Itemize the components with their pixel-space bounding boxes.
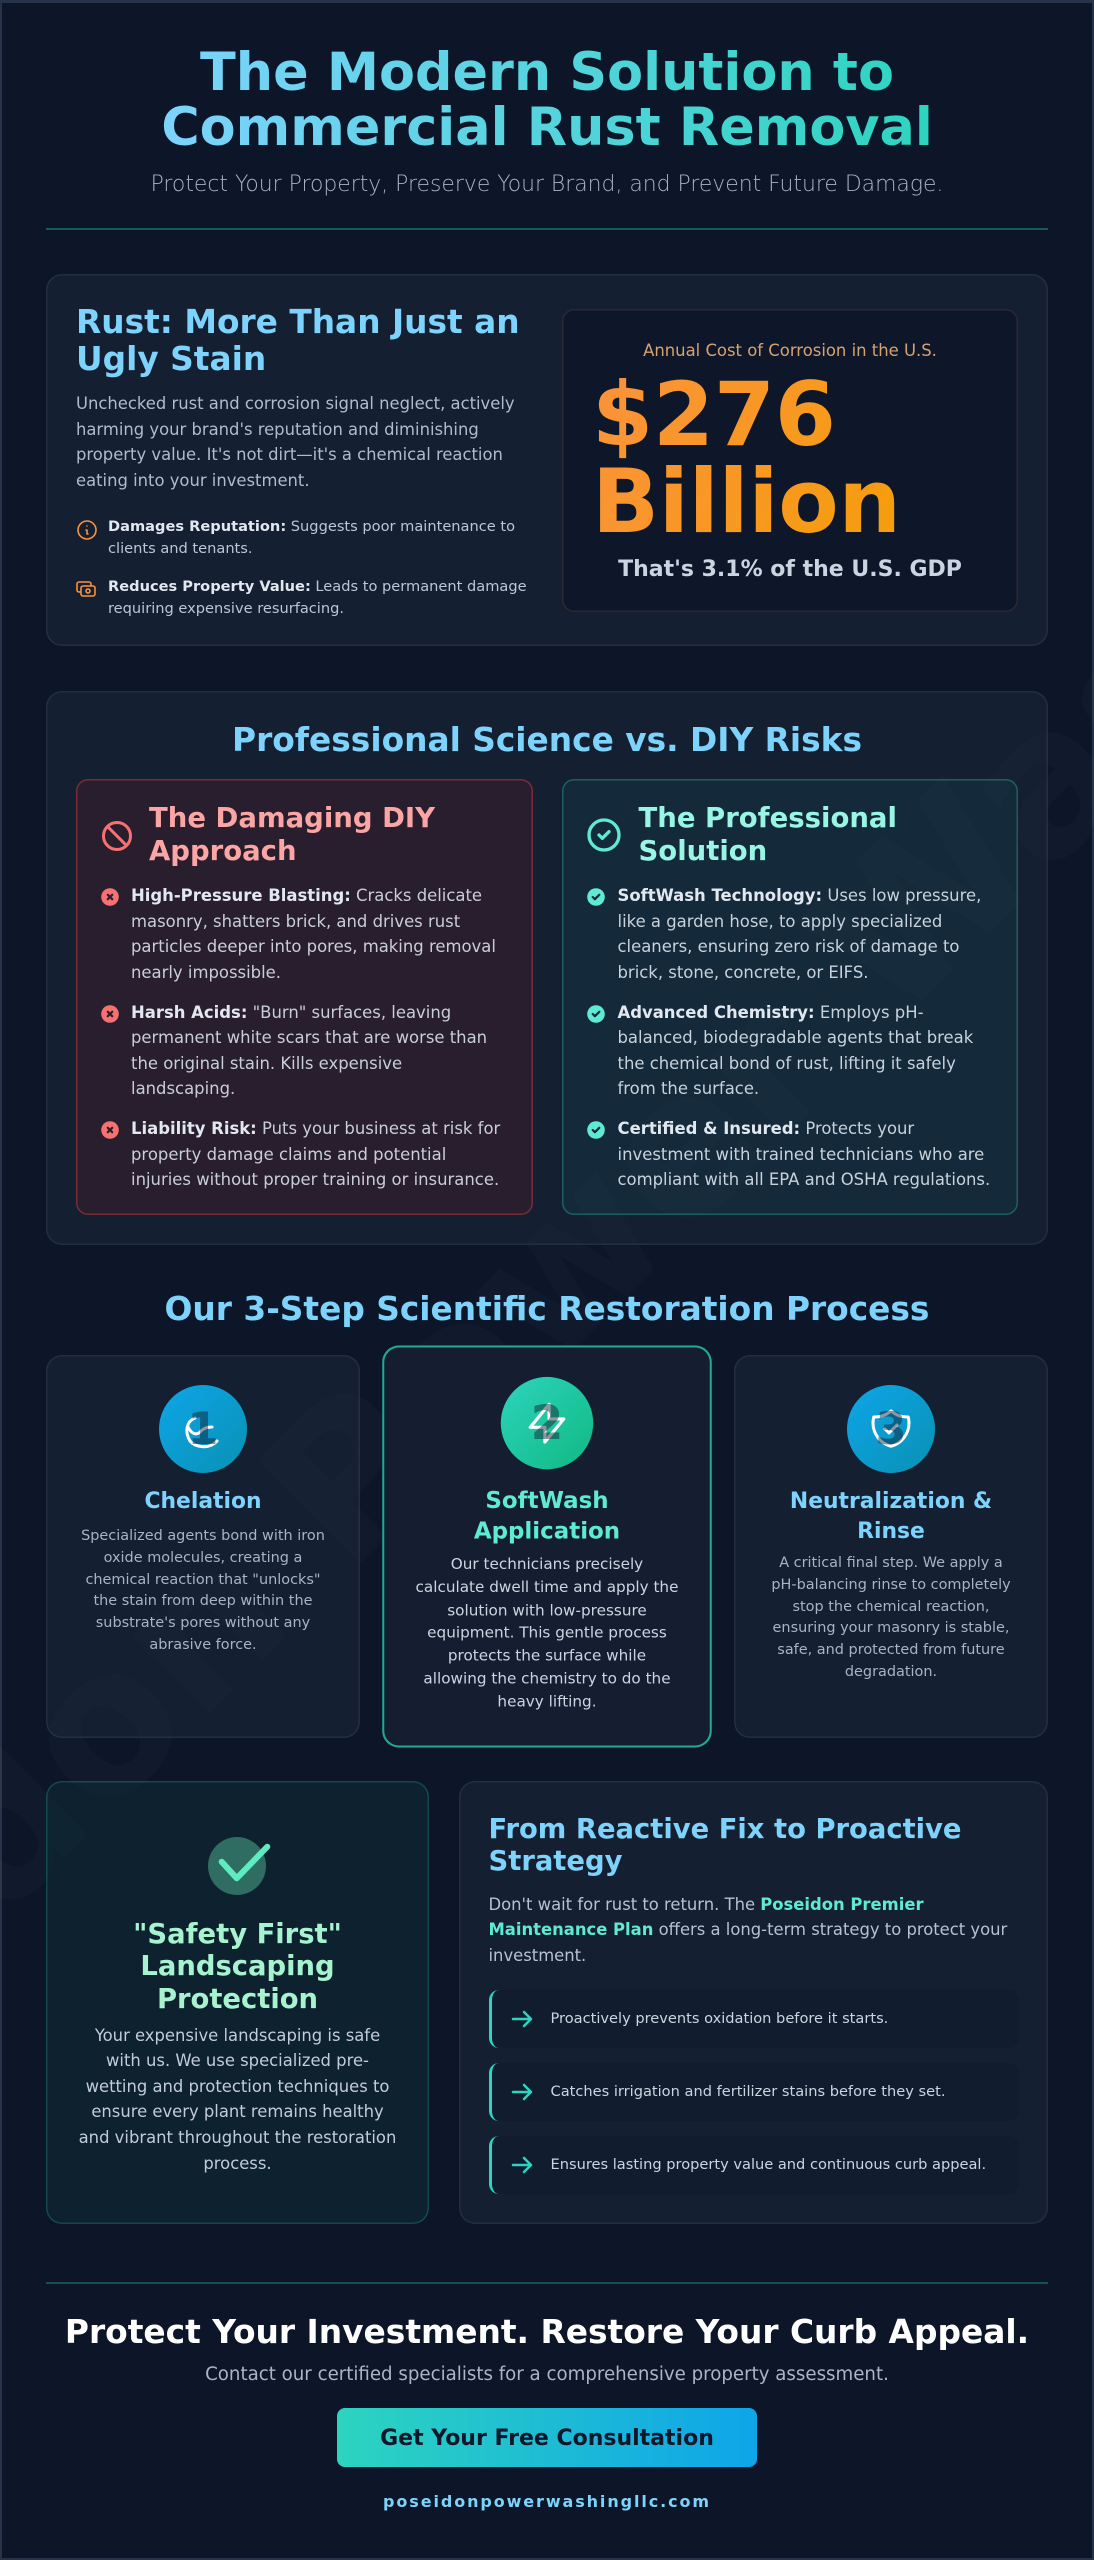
heading: safety: Landscaping xyxy=(140,1951,335,1982)
button: Get Your Free Consultation xyxy=(380,2426,714,2451)
title: The Modern Solution to xyxy=(200,42,894,103)
panel: DIY approach xyxy=(76,779,533,1215)
proactive text: Maintenance Plan offers a long-term strategy to protect your xyxy=(488,1920,1007,1939)
item: liability risk: Liability Risk: Puts your business at risk for xyxy=(131,1119,500,1138)
panel: proactive strategy xyxy=(459,1781,1048,2224)
stat box xyxy=(562,309,1018,612)
item: certified and insured xyxy=(618,1119,990,1189)
step 3 text: pH-balancing rinse to completely xyxy=(771,1577,1011,1593)
item: high-pressure blasting: particles deeper into pores, making removal xyxy=(131,937,496,956)
stat note: That's 3.1% of the U.S. GDP xyxy=(618,556,962,582)
bullet icon xyxy=(587,1005,605,1023)
bullet icon xyxy=(101,1121,119,1139)
heading: rust xyxy=(76,303,520,378)
bullet icon xyxy=(101,1005,119,1023)
stat label: Annual Cost of Corrosion in the U.S. xyxy=(643,341,937,360)
item: advanced chemistry xyxy=(618,1002,974,1098)
icon: step 3 xyxy=(847,1385,935,1473)
step 3 text: degradation. xyxy=(845,1664,937,1680)
step 3 title xyxy=(790,1489,992,1544)
item: certified and insured: investment with trained technicians who are xyxy=(618,1145,984,1164)
proactive text xyxy=(488,1895,1008,1965)
icon: step 3: 3 xyxy=(875,1402,907,1455)
safety text: and vibrant throughout the restoration xyxy=(79,2128,396,2147)
item: advanced chemistry: Advanced Chemistry: Employs pH- xyxy=(618,1002,924,1022)
benefit 2: Catches irrigation and fertilizer stains before they set. xyxy=(550,2083,945,2100)
safety text: ensure every plant remains healthy xyxy=(91,2102,384,2121)
panel: step 2 softwash xyxy=(382,1345,712,1748)
website: poseidonpowerwashingllc.com xyxy=(383,2492,711,2511)
stat value: $276 xyxy=(592,363,836,466)
item: advanced chemistry: from the surface. xyxy=(618,1079,759,1098)
step 2 text: solution with low-pressure xyxy=(447,1602,647,1619)
heading: DIY: Approach xyxy=(149,834,297,866)
step 2 title: SoftWash xyxy=(485,1488,609,1514)
icon: info xyxy=(77,520,97,540)
safety text: Your expensive landscaping is safe xyxy=(95,2026,380,2045)
item: harsh acids: landscaping. xyxy=(131,1079,235,1098)
benefit 3: Ensures lasting property value and continuous curb appeal. xyxy=(550,2156,986,2173)
heading: professional: The Professional xyxy=(638,802,897,834)
item: reduces property value xyxy=(108,578,527,617)
step 2 text: protects the surface while xyxy=(448,1648,646,1665)
item: high-pressure blasting xyxy=(131,886,496,982)
intro paragraph: eating into your investment. xyxy=(76,471,310,490)
step 1 text: Specialized agents bond with iron xyxy=(81,1528,325,1544)
heading: proactive: From Reactive Fix to Proactive xyxy=(488,1814,961,1845)
step 3 text xyxy=(771,1555,1011,1680)
item: softwash technology: SoftWash Technology: Uses low pressure, xyxy=(618,886,981,905)
heading: safety: Protection xyxy=(157,1984,318,2015)
item: reduces property value: Reduces Property Value: Leads to permanent damage xyxy=(108,578,527,595)
panel: step 1 chelation xyxy=(46,1355,360,1738)
icon: cash xyxy=(76,581,96,597)
heading: professional xyxy=(638,802,897,866)
step 3 text: stop the chemical reaction, xyxy=(792,1599,990,1615)
proactive text: investment. xyxy=(488,1946,586,1965)
heading: DIY xyxy=(149,802,436,866)
heading: safety: "Safety First" xyxy=(133,1918,342,1950)
panel: comparison xyxy=(46,691,1048,1245)
heading: proactive xyxy=(488,1814,961,1877)
heading: comparison: Professional Science vs. DIY Risks xyxy=(232,720,862,758)
proactive text: Don't wait for rust to return. The Poseidon Premier xyxy=(488,1895,924,1914)
safety text: wetting and protection techniques to xyxy=(86,2077,389,2096)
item: softwash technology xyxy=(618,886,981,982)
item: certified and insured: Certified & Insured: Protects your xyxy=(618,1119,914,1138)
heading: proactive: Strategy xyxy=(488,1846,622,1877)
item: liability risk xyxy=(131,1119,500,1189)
item: harsh acids: permanent white scars that are worse than xyxy=(131,1028,487,1047)
item: advanced chemistry: the chemical bond of rust, lifting it safely xyxy=(618,1054,956,1073)
step 3 text: ensuring your masonry is stable, xyxy=(773,1620,1009,1636)
panel: professional solution xyxy=(562,779,1018,1215)
heading: safety xyxy=(133,1918,342,2015)
icon: check circle xyxy=(587,818,621,852)
step 3 text: A critical final step. We apply a xyxy=(779,1555,1003,1571)
step 2 title xyxy=(474,1488,620,1544)
stat value xyxy=(592,363,901,553)
step 2 text: allowing the chemistry to do the xyxy=(423,1671,671,1688)
intro paragraph: property value. It's not dirt—it's a chemical reaction xyxy=(76,445,503,464)
title xyxy=(161,42,933,158)
step 1 title: Chelation xyxy=(144,1489,262,1514)
footer text: Contact our certified specialists for a comprehensive property assessment. xyxy=(205,2364,889,2384)
safety text: with us. We use specialized pre- xyxy=(106,2051,369,2070)
item: high-pressure blasting: nearly impossible. xyxy=(131,963,281,982)
panel: rust cost xyxy=(46,274,1048,646)
heading: professional: Solution xyxy=(638,834,767,866)
icon: step 2: 2 xyxy=(531,1395,563,1450)
item: harsh acids: Harsh Acids: "Burn" surfaces, leaving xyxy=(131,1002,451,1022)
heading: rust: Ugly Stain xyxy=(76,340,266,378)
icon: step 2 xyxy=(501,1377,593,1469)
footer heading: Protect Your Investment. Restore Your Curb Appeal. xyxy=(65,2313,1029,2351)
safety text: process. xyxy=(203,2154,272,2173)
item: reduces property value: requiring expensive resurfacing. xyxy=(108,600,344,617)
benefit 1 xyxy=(488,1990,1018,2048)
item: softwash technology: cleaners, ensuring zero risk of damage to xyxy=(618,937,960,956)
icon: prohibited xyxy=(102,821,132,851)
step 2 text: equipment. This gentle process xyxy=(427,1625,667,1642)
bullet icon xyxy=(101,888,119,906)
item: certified and insured: compliant with all EPA and OSHA regulations. xyxy=(618,1170,990,1189)
stat value: Billion xyxy=(592,450,901,553)
step 1 text: chemical reaction that "unlocks" xyxy=(85,1572,321,1588)
item: harsh acids xyxy=(131,1002,487,1098)
item: high-pressure blasting: High-Pressure Blasting: Cracks delicate xyxy=(131,886,482,905)
intro paragraph: Unchecked rust and corrosion signal neglect, actively xyxy=(76,394,515,413)
benefit 3 xyxy=(488,2136,1018,2194)
item: softwash technology: like a garden hose, to apply specialized xyxy=(618,912,942,931)
benefit 2 xyxy=(488,2063,1018,2121)
step 3 text: safe, and protected from future xyxy=(777,1642,1005,1658)
item: advanced chemistry: balanced, biodegradable agents that break xyxy=(618,1028,973,1047)
step 2 text xyxy=(416,1556,678,1711)
panel: landscaping protection xyxy=(46,1781,429,2224)
safety text xyxy=(79,2026,396,2173)
step 2 title: Application xyxy=(474,1518,620,1544)
heading: process: Our 3-Step Scientific Restoration Process xyxy=(165,1290,929,1328)
item: liability risk: injuries without proper training or insurance. xyxy=(131,1170,499,1189)
step 3 title: Neutralization & xyxy=(790,1489,992,1514)
intro paragraph: harming your brand's reputation and diminishing xyxy=(76,420,479,439)
item: damages reputation xyxy=(108,518,515,557)
benefit 1: Proactively prevents oxidation before it starts. xyxy=(550,2010,888,2027)
step 1 text: substrate's pores without any xyxy=(96,1615,310,1631)
intro paragraph xyxy=(76,394,515,490)
step 1 text xyxy=(81,1528,325,1653)
title: Commercial Rust Removal xyxy=(161,97,933,158)
step 3 title: Rinse xyxy=(857,1518,925,1544)
panel: step 3 neutralization xyxy=(734,1355,1048,1738)
button xyxy=(337,2408,757,2467)
step 1 text: the stain from deep within the xyxy=(93,1593,312,1609)
icon: step 1: 1 xyxy=(187,1402,219,1455)
step 2 text: heavy lifting. xyxy=(497,1694,597,1711)
step 1 text: oxide molecules, creating a xyxy=(104,1550,302,1566)
step 2 text: calculate dwell time and apply the xyxy=(416,1579,678,1596)
bullet icon xyxy=(587,888,605,906)
icon: safety check xyxy=(208,1837,270,1895)
step 2 text: Our technicians precisely xyxy=(451,1556,643,1573)
heading: DIY: The Damaging DIY xyxy=(149,802,435,834)
item: liability risk: property damage claims and potential xyxy=(131,1145,446,1164)
item: damages reputation: clients and tenants. xyxy=(108,540,253,557)
item: harsh acids: the original stain. Kills expensive xyxy=(131,1054,402,1073)
bullet icon xyxy=(587,1121,605,1139)
subtitle: Protect Your Property, Preserve Your Brand, and Prevent Future Damage. xyxy=(151,172,943,196)
item: softwash technology: brick, stone, concrete, or EIFS. xyxy=(618,963,868,982)
heading: rust: Rust: More Than Just an xyxy=(76,303,520,341)
item: high-pressure blasting: masonry, shatters brick, and drives rust xyxy=(131,912,460,931)
step 1 text: abrasive force. xyxy=(149,1637,257,1653)
icon: step 1 xyxy=(159,1385,247,1473)
item: damages reputation: Damages Reputation: Suggests poor maintenance to xyxy=(108,518,515,535)
